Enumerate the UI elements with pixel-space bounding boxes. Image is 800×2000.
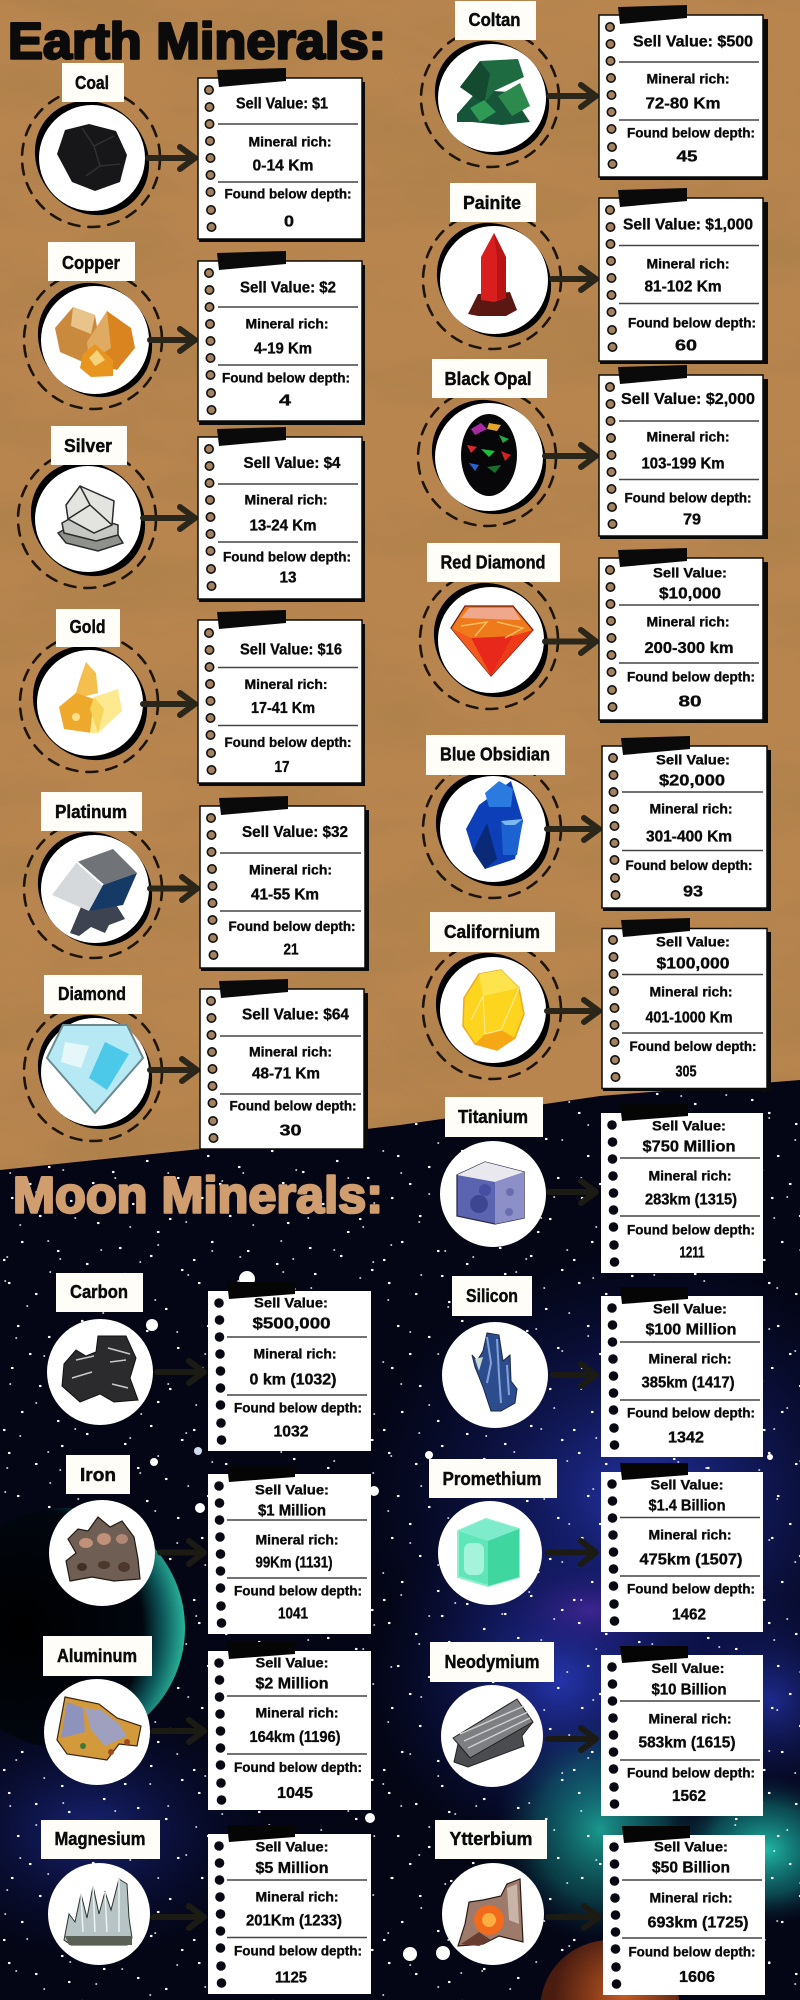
panel: Copper: [14, 242, 365, 425]
card: Promethium stats: 1462: [672, 1606, 706, 1624]
label: Magnesium: Magnesium: [54, 1829, 146, 1849]
label: Coltan: [455, 1, 536, 40]
card: Coal stats: [198, 68, 365, 242]
background: kraft paper: [0, 0, 800, 1180]
card: Promethium stats: Found below depth:: [627, 1582, 755, 1596]
card: Magnesium stats: Mineral rich:: [256, 1890, 338, 1904]
card: Diamond stats: Found below depth:: [230, 1098, 356, 1114]
panel: Carbon: [47, 1273, 371, 1451]
label: Diamond: [44, 975, 142, 1014]
card: Titanium stats: [601, 1104, 763, 1273]
icon: painite: [413, 199, 575, 361]
label: Silicon: [452, 1276, 532, 1316]
label: Ytterbium: [435, 1820, 547, 1859]
label: Titanium: Titanium: [458, 1107, 528, 1127]
card: Carbon stats: 1032: [274, 1424, 308, 1440]
card: Blue Obsidian stats: Sell Value:: [656, 752, 730, 768]
label: Californium: [430, 912, 555, 952]
panel: Iron: [49, 1455, 371, 1634]
icon: gold: [9, 622, 171, 784]
label: Magnesium: [41, 1820, 160, 1859]
label: Painite: [450, 183, 536, 222]
label: Diamond: Diamond: [58, 984, 126, 1004]
card: Platinum stats: Mineral rich:: [249, 862, 332, 878]
card: Diamond stats: Mineral rich:: [249, 1044, 332, 1060]
arrow: [153, 1720, 204, 1742]
label: Coal: Coal: [75, 73, 109, 93]
card: Gold stats: Found below depth:: [224, 735, 352, 750]
card: Painite stats: Sell Value: $1,000: [623, 216, 753, 234]
label: Iron: Iron: [80, 1465, 116, 1485]
label: Blue Obsidian: [426, 735, 565, 775]
card: Californium stats: [602, 918, 771, 1091]
card: Neodymium stats: [601, 1646, 763, 1816]
panel: Californium: [412, 912, 771, 1091]
arrow: [549, 85, 596, 107]
card: Copper stats: Sell Value: $2: [240, 280, 336, 296]
card: Blue Obsidian stats: 93: [683, 884, 703, 900]
card: Titanium stats: 283km (1315): [645, 1192, 737, 1208]
card: Gold stats: 17-41 Km: [251, 700, 315, 717]
arrow: [148, 147, 195, 169]
icon: platinum: [14, 808, 176, 970]
card: Aluminum stats: 164km (1196): [250, 1729, 340, 1746]
panel: Neodymium: [430, 1642, 763, 1816]
card: Copper stats: [198, 251, 365, 425]
card: Gold stats: 17: [274, 759, 290, 776]
icon: red diamond: [410, 559, 572, 721]
label: Gold: Gold: [70, 617, 106, 637]
arrow: [157, 1361, 204, 1383]
label: Platinum: [41, 792, 142, 831]
card: Magnesium stats: Found below depth:: [234, 1944, 362, 1958]
icon: copper: [14, 259, 176, 421]
card: Californium stats: Mineral rich:: [650, 984, 732, 1000]
card: Silicon stats: 1342: [668, 1430, 704, 1446]
label: Silicon: Silicon: [466, 1286, 518, 1306]
card: Magnesium stats: $5 Million: [256, 1860, 328, 1877]
card: Blue Obsidian stats: 301-400 Km: [646, 828, 732, 846]
card: Silicon stats: 385km (1417): [642, 1374, 734, 1392]
arrow: [548, 1541, 596, 1564]
card: Neodymium stats: 583km (1615): [638, 1734, 736, 1752]
arrow: [143, 693, 195, 715]
card: Promethium stats: [601, 1463, 763, 1632]
label: Gold: [56, 609, 120, 647]
card: Carbon stats: Mineral rich:: [254, 1346, 336, 1362]
card: Red Diamond stats: [599, 548, 768, 723]
card: Copper stats: Mineral rich:: [246, 316, 328, 332]
card: Magnesium stats: [208, 1825, 371, 1994]
card: Coltan stats: 45: [676, 148, 698, 166]
card: Black Opal stats: Found below depth:: [624, 490, 752, 506]
card: Painite stats: 81-102 Km: [644, 278, 722, 296]
card: Ytterbium stats: 693km (1725): [648, 1914, 748, 1932]
card: Iron stats: $1 Million: [258, 1502, 326, 1520]
card: Magnesium stats: Sell Value:: [256, 1840, 328, 1854]
arrow: [552, 268, 596, 290]
label: Red Diamond: Red Diamond: [440, 552, 546, 572]
card: Coal stats: Mineral rich:: [248, 134, 332, 150]
icon: iron: [49, 1500, 155, 1606]
card: Painite stats: Mineral rich:: [646, 256, 730, 272]
card: Diamond stats: Sell Value: $64: [242, 1006, 349, 1024]
arrow: [150, 329, 195, 351]
card: Copper stats: 4: [279, 392, 292, 410]
label: Aluminum: [43, 1636, 152, 1676]
card: Iron stats: [208, 1465, 371, 1634]
card: Black Opal stats: Sell Value: $2,000: [621, 391, 755, 408]
card: Platinum stats: Found below depth:: [228, 919, 356, 934]
icon: silver: [7, 438, 169, 600]
card: Aluminum stats: 1045: [277, 1785, 313, 1802]
panel: Blue Obsidian: [412, 735, 771, 911]
card: Iron stats: Found below depth:: [234, 1584, 362, 1598]
card: Promethium stats: Mineral rich:: [648, 1528, 732, 1542]
card: Neodymium stats: Mineral rich:: [648, 1712, 732, 1726]
card: Gold stats: [198, 610, 365, 786]
icon: magnesium: [48, 1863, 150, 1965]
card: Diamond stats: 30: [280, 1122, 302, 1140]
card: Silver stats: 13: [280, 570, 297, 586]
label: Neodymium: [430, 1642, 554, 1682]
card: Diamond stats: 48-71 Km: [252, 1066, 320, 1082]
card: Californium stats: $100,000: [656, 956, 730, 972]
card: Blue Obsidian stats: Found below depth:: [626, 858, 752, 873]
panel: Coal: [11, 63, 365, 242]
card: Magnesium stats: 201Km (1233): [246, 1912, 342, 1930]
label: Platinum: Platinum: [55, 802, 127, 822]
card: Titanium stats: Found below depth:: [627, 1222, 755, 1238]
card: Gold stats: Sell Value: $16: [240, 642, 342, 658]
label: Blue Obsidian: Blue Obsidian: [440, 744, 550, 764]
card: Carbon stats: [208, 1282, 371, 1451]
card: Titanium stats: 1211: [680, 1244, 705, 1262]
card: Coltan stats: Found below depth:: [627, 126, 755, 140]
label: Titanium: [445, 1097, 543, 1137]
card: Silicon stats: [601, 1287, 763, 1457]
card: Ytterbium stats: Found below depth:: [628, 1944, 756, 1960]
title: Moon Minerals: Moon Minerals:: [13, 1166, 383, 1224]
arrow: [547, 1000, 599, 1022]
card: Red Diamond stats: $10,000: [659, 586, 721, 602]
card: Aluminum stats: Mineral rich:: [256, 1706, 338, 1720]
card: Promethium stats: 475km (1507): [640, 1552, 742, 1568]
card: Californium stats: Sell Value:: [656, 934, 730, 950]
panel: Red Diamond: [410, 543, 768, 723]
panel: Ytterbium: [435, 1820, 765, 1995]
card: Californium stats: Found below depth:: [630, 1039, 756, 1054]
icon: coltan: [411, 17, 573, 179]
panel: Black Opal: [408, 359, 768, 539]
label: Black Opal: Black Opal: [444, 369, 532, 389]
card: Promethium stats: $1.4 Billion: [648, 1498, 726, 1514]
card: Black Opal stats: Mineral rich:: [646, 430, 730, 444]
icon: titanium: [440, 1141, 546, 1247]
icon: carbon: [47, 1319, 153, 1425]
card: Ytterbium stats: $50 Billion: [652, 1860, 730, 1876]
card: Copper stats: Found below depth:: [222, 370, 350, 386]
arrow: [150, 1059, 197, 1081]
panel: Silver: [7, 426, 365, 602]
panel: Diamond: [14, 975, 368, 1153]
card: Painite stats: Found below depth:: [628, 316, 756, 330]
card: Carbon stats: 0 km (1032): [250, 1372, 336, 1388]
card: Silicon stats: Mineral rich:: [648, 1352, 732, 1366]
arrow: [553, 1364, 596, 1386]
icon: coal: [11, 77, 173, 239]
arrow: [545, 630, 596, 653]
label: Carbon: Carbon: [70, 1282, 128, 1302]
card: Neodymium stats: 1562: [672, 1788, 706, 1805]
card: Iron stats: 1041: [278, 1606, 308, 1622]
label: Black Opal: [432, 359, 547, 398]
title: Earth Minerals: Earth Minerals:: [8, 12, 386, 70]
card: Titanium stats: Sell Value:: [652, 1118, 726, 1134]
card: Platinum stats: Sell Value: $32: [242, 824, 348, 841]
card: Ytterbium stats: Mineral rich:: [650, 1890, 732, 1906]
card: Iron stats: 99Km (1131): [256, 1554, 332, 1572]
card: Black Opal stats: 103-199 Km: [642, 456, 724, 472]
panel: Gold: [9, 609, 365, 786]
label: Coltan: Coltan: [468, 10, 520, 30]
card: Iron stats: Mineral rich:: [256, 1532, 338, 1548]
label: Copper: [48, 242, 135, 281]
label: Californium: Californium: [444, 922, 540, 942]
panel: Painite: [413, 183, 768, 364]
label: Ytterbium: Ytterbium: [450, 1829, 532, 1849]
card: Neodymium stats: $10 Billion: [652, 1682, 726, 1698]
label: Copper: Copper: [62, 253, 120, 273]
panel: Coltan: [411, 1, 768, 180]
card: Aluminum stats: Sell Value:: [256, 1656, 328, 1670]
card: Platinum stats: [200, 796, 369, 971]
card: Red Diamond stats: 80: [678, 694, 702, 710]
card: Gold stats: Mineral rich:: [244, 677, 328, 692]
card: Coltan stats: Sell Value: $500: [633, 34, 753, 50]
card: Blue Obsidian stats: $20,000: [659, 772, 725, 790]
card: Carbon stats: Sell Value:: [254, 1296, 328, 1310]
card: Red Diamond stats: 200-300 km: [644, 640, 734, 657]
panel: Platinum: [14, 792, 369, 971]
icon: neodymium: [441, 1685, 543, 1787]
card: Platinum stats: 21: [284, 942, 299, 958]
card: Neodymium stats: Found below depth:: [627, 1766, 755, 1780]
background: teal planet: [0, 1508, 185, 1748]
card: Coltan stats: Mineral rich:: [646, 72, 730, 86]
panel: Magnesium: [41, 1820, 371, 1994]
card: Silver stats: Mineral rich:: [244, 492, 328, 508]
card: Silicon stats: Sell Value:: [653, 1302, 727, 1316]
label: Silver: Silver: [64, 436, 112, 456]
arrow: [160, 1541, 204, 1564]
card: Promethium stats: Sell Value:: [650, 1478, 724, 1492]
card: Black Opal stats: 79: [683, 512, 701, 528]
card: Coal stats: 0: [284, 214, 294, 230]
card: Coal stats: Found below depth:: [224, 186, 352, 202]
arrow: [150, 877, 197, 900]
arrow: [143, 507, 195, 529]
card: Red Diamond stats: Mineral rich:: [646, 614, 730, 630]
card: Coal stats: 0-14 Km: [252, 158, 314, 174]
card: Red Diamond stats: Found below depth:: [627, 670, 755, 684]
arrow: [547, 818, 599, 840]
icon: diamond: [14, 991, 176, 1153]
card: Titanium stats: $750 Million: [642, 1138, 736, 1156]
card: Ytterbium stats: [603, 1826, 765, 1995]
label: Promethium: Promethium: [442, 1469, 542, 1489]
background: orange planet: [540, 1940, 680, 2000]
icon: promethium: [438, 1501, 542, 1605]
arrow: [545, 445, 596, 467]
label: Promethium: [429, 1459, 557, 1498]
icon: ytterbium: [442, 1863, 544, 1965]
card: Silicon stats: Found below depth:: [627, 1406, 755, 1420]
label: Carbon: [56, 1273, 143, 1312]
arrow: [153, 1906, 204, 1928]
card: Iron stats: Sell Value:: [255, 1482, 329, 1498]
card: Copper stats: 4-19 Km: [254, 340, 312, 358]
card: Silicon stats: $100 Million: [646, 1322, 736, 1338]
card: Red Diamond stats: Sell Value:: [653, 566, 727, 580]
card: Ytterbium stats: 1606: [679, 1969, 715, 1986]
card: Aluminum stats: [208, 1642, 371, 1810]
panel: Aluminum: [43, 1636, 371, 1810]
icon: californium: [412, 929, 574, 1091]
card: Coltan stats: 72-80 Km: [646, 96, 720, 112]
card: Silver stats: Sell Value: $4: [244, 455, 341, 472]
card: Blue Obsidian stats: [602, 736, 771, 911]
card: Carbon stats: Found below depth:: [234, 1400, 362, 1416]
label: Painite: Painite: [463, 193, 521, 213]
card: Coal stats: Sell Value: $1: [236, 96, 328, 112]
arrow: [549, 1181, 596, 1203]
panel: Silicon: [442, 1276, 763, 1457]
card: Ytterbium stats: Sell Value:: [654, 1840, 728, 1854]
arrow: [548, 1906, 599, 1928]
label: Silver: [51, 426, 127, 465]
card: Silver stats: Found below depth:: [223, 550, 351, 564]
card: Silver stats: 13-24 Km: [250, 518, 316, 534]
icon: aluminum: [44, 1679, 150, 1785]
panel: Promethium: [429, 1459, 763, 1632]
label: Coal: [62, 63, 124, 102]
icon: black opal: [408, 376, 570, 538]
card: Neodymium stats: Sell Value:: [652, 1661, 724, 1676]
label: Aluminum: Aluminum: [57, 1646, 137, 1666]
label: Neodymium: Neodymium: [444, 1652, 540, 1672]
card: Aluminum stats: Found below depth:: [234, 1760, 362, 1775]
card: Painite stats: 60: [675, 338, 697, 354]
card: Magnesium stats: 1125: [275, 1970, 307, 1986]
icon: blue obsidian: [412, 748, 574, 910]
card: Platinum stats: 41-55 Km: [251, 886, 319, 904]
panel: Titanium: [440, 1097, 763, 1273]
icon: silicon: [442, 1322, 548, 1428]
label: Iron: [66, 1455, 130, 1494]
card: Carbon stats: $500,000: [252, 1316, 330, 1332]
card: Californium stats: 305: [676, 1064, 697, 1080]
card: Painite stats: [599, 188, 768, 364]
arrow: [548, 1728, 596, 1750]
card: Aluminum stats: $2 Million: [256, 1676, 328, 1692]
card: Coltan stats: [599, 5, 768, 180]
card: Blue Obsidian stats: Mineral rich:: [650, 802, 732, 816]
card: Californium stats: 401-1000 Km: [646, 1010, 732, 1026]
card: Silver stats: [198, 427, 365, 602]
card: Diamond stats: [200, 979, 368, 1149]
label: Red Diamond: [427, 543, 560, 582]
card: Titanium stats: Mineral rich:: [648, 1168, 732, 1184]
card: Black Opal stats: [599, 365, 768, 539]
